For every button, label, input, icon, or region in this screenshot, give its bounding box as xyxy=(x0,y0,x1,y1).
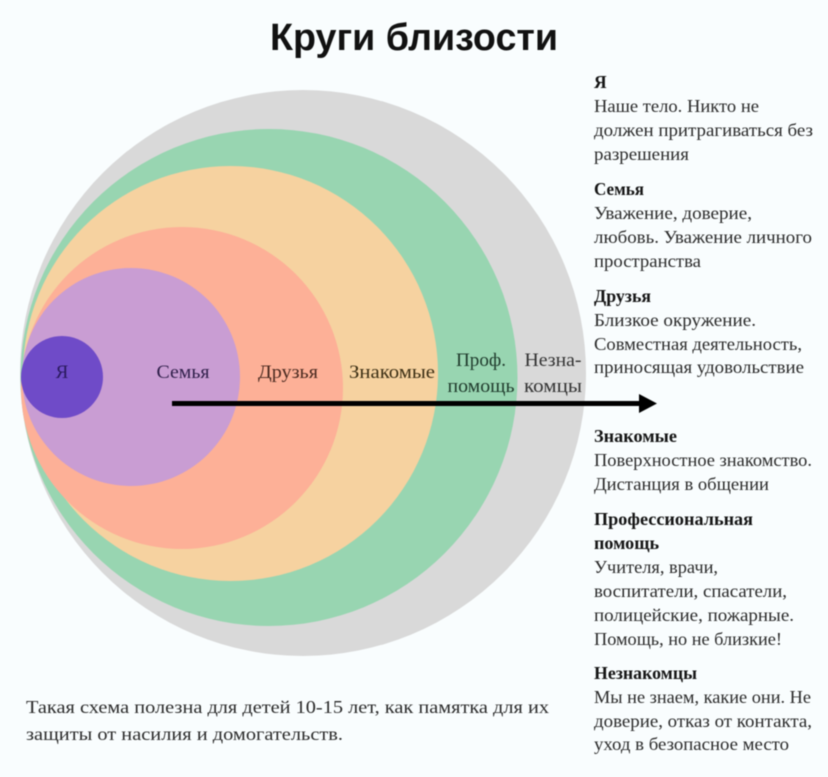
label: professional help: помощь xyxy=(448,376,515,397)
text block: professional help: Помощь, но не близкие! xyxy=(594,629,782,649)
text block: me xyxy=(594,72,813,164)
arrow xyxy=(172,394,657,413)
text block: family xyxy=(594,179,812,271)
text block: family: Уважение, доверие, xyxy=(594,203,752,223)
text block: acquaintances: Знакомые xyxy=(594,426,677,446)
text block: friends: Близкое окружение. xyxy=(594,310,756,330)
text block: me: Наше тело. Никто не xyxy=(594,96,759,116)
text block: family: пространства xyxy=(594,251,701,271)
diagram: concentric circles xyxy=(20,90,586,656)
label: friends: Друзья xyxy=(258,362,318,383)
text block: acquaintances xyxy=(594,426,812,494)
text block: me: разрешения xyxy=(594,144,689,164)
circle: friends xyxy=(21,227,343,549)
text block: friends: приносящая удовольствие xyxy=(594,357,804,377)
label: strangers: Незна- xyxy=(524,350,582,371)
footnote: защиты от насилия и домогательств. xyxy=(26,724,343,744)
text block: me: должен притрагиваться без xyxy=(594,120,813,140)
circle: family xyxy=(22,268,240,486)
text block: me: Я xyxy=(594,72,607,92)
label: professional help xyxy=(448,350,515,397)
label: strangers xyxy=(524,350,582,397)
label: me: Я xyxy=(56,362,69,383)
text block: professional help: воспитатели, спасатели, xyxy=(594,581,787,601)
circle: strangers xyxy=(20,90,586,656)
circle: me xyxy=(21,336,103,418)
text block: strangers xyxy=(594,663,812,754)
text block: strangers: доверие, отказ от контакта, xyxy=(594,711,812,731)
footnote: Такая схема полезна для детей 10-15 лет, как памятка для их xyxy=(26,697,549,717)
text block: friends: Совместная деятельность, xyxy=(594,334,802,354)
text block: strangers: уход в безопасное место xyxy=(594,734,789,754)
text block: professional help xyxy=(594,509,794,649)
label: acquaintances: Знакомые xyxy=(349,362,435,383)
text block: professional help: полицейские, пожарные. xyxy=(594,605,794,625)
label: strangers: комцы xyxy=(524,376,582,397)
text block: acquaintances: Поверхностное знакомство. xyxy=(594,450,812,470)
title: Круги близости xyxy=(270,17,558,59)
circle: acquaintances xyxy=(23,166,438,581)
label: family: Семья xyxy=(156,362,210,383)
text block: strangers: Мы не знаем, какие они. Не xyxy=(594,687,811,707)
text block: family: любовь. Уважение личного xyxy=(594,227,812,247)
footnote xyxy=(26,697,549,744)
text block: family: Семья xyxy=(594,179,644,199)
text block: acquaintances: Дистанция в общении xyxy=(594,474,769,494)
text block: professional help: Учителя, врачи, xyxy=(594,557,718,577)
text block: friends: Друзья xyxy=(594,286,651,306)
label: professional help: Проф. xyxy=(456,350,506,371)
text block: professional help: Профессиональная xyxy=(594,509,753,529)
circle: professional help xyxy=(20,129,518,626)
text block: strangers: Незнакомцы xyxy=(594,663,697,683)
text block: friends xyxy=(594,286,804,377)
text block: professional help: помощь xyxy=(594,533,659,553)
